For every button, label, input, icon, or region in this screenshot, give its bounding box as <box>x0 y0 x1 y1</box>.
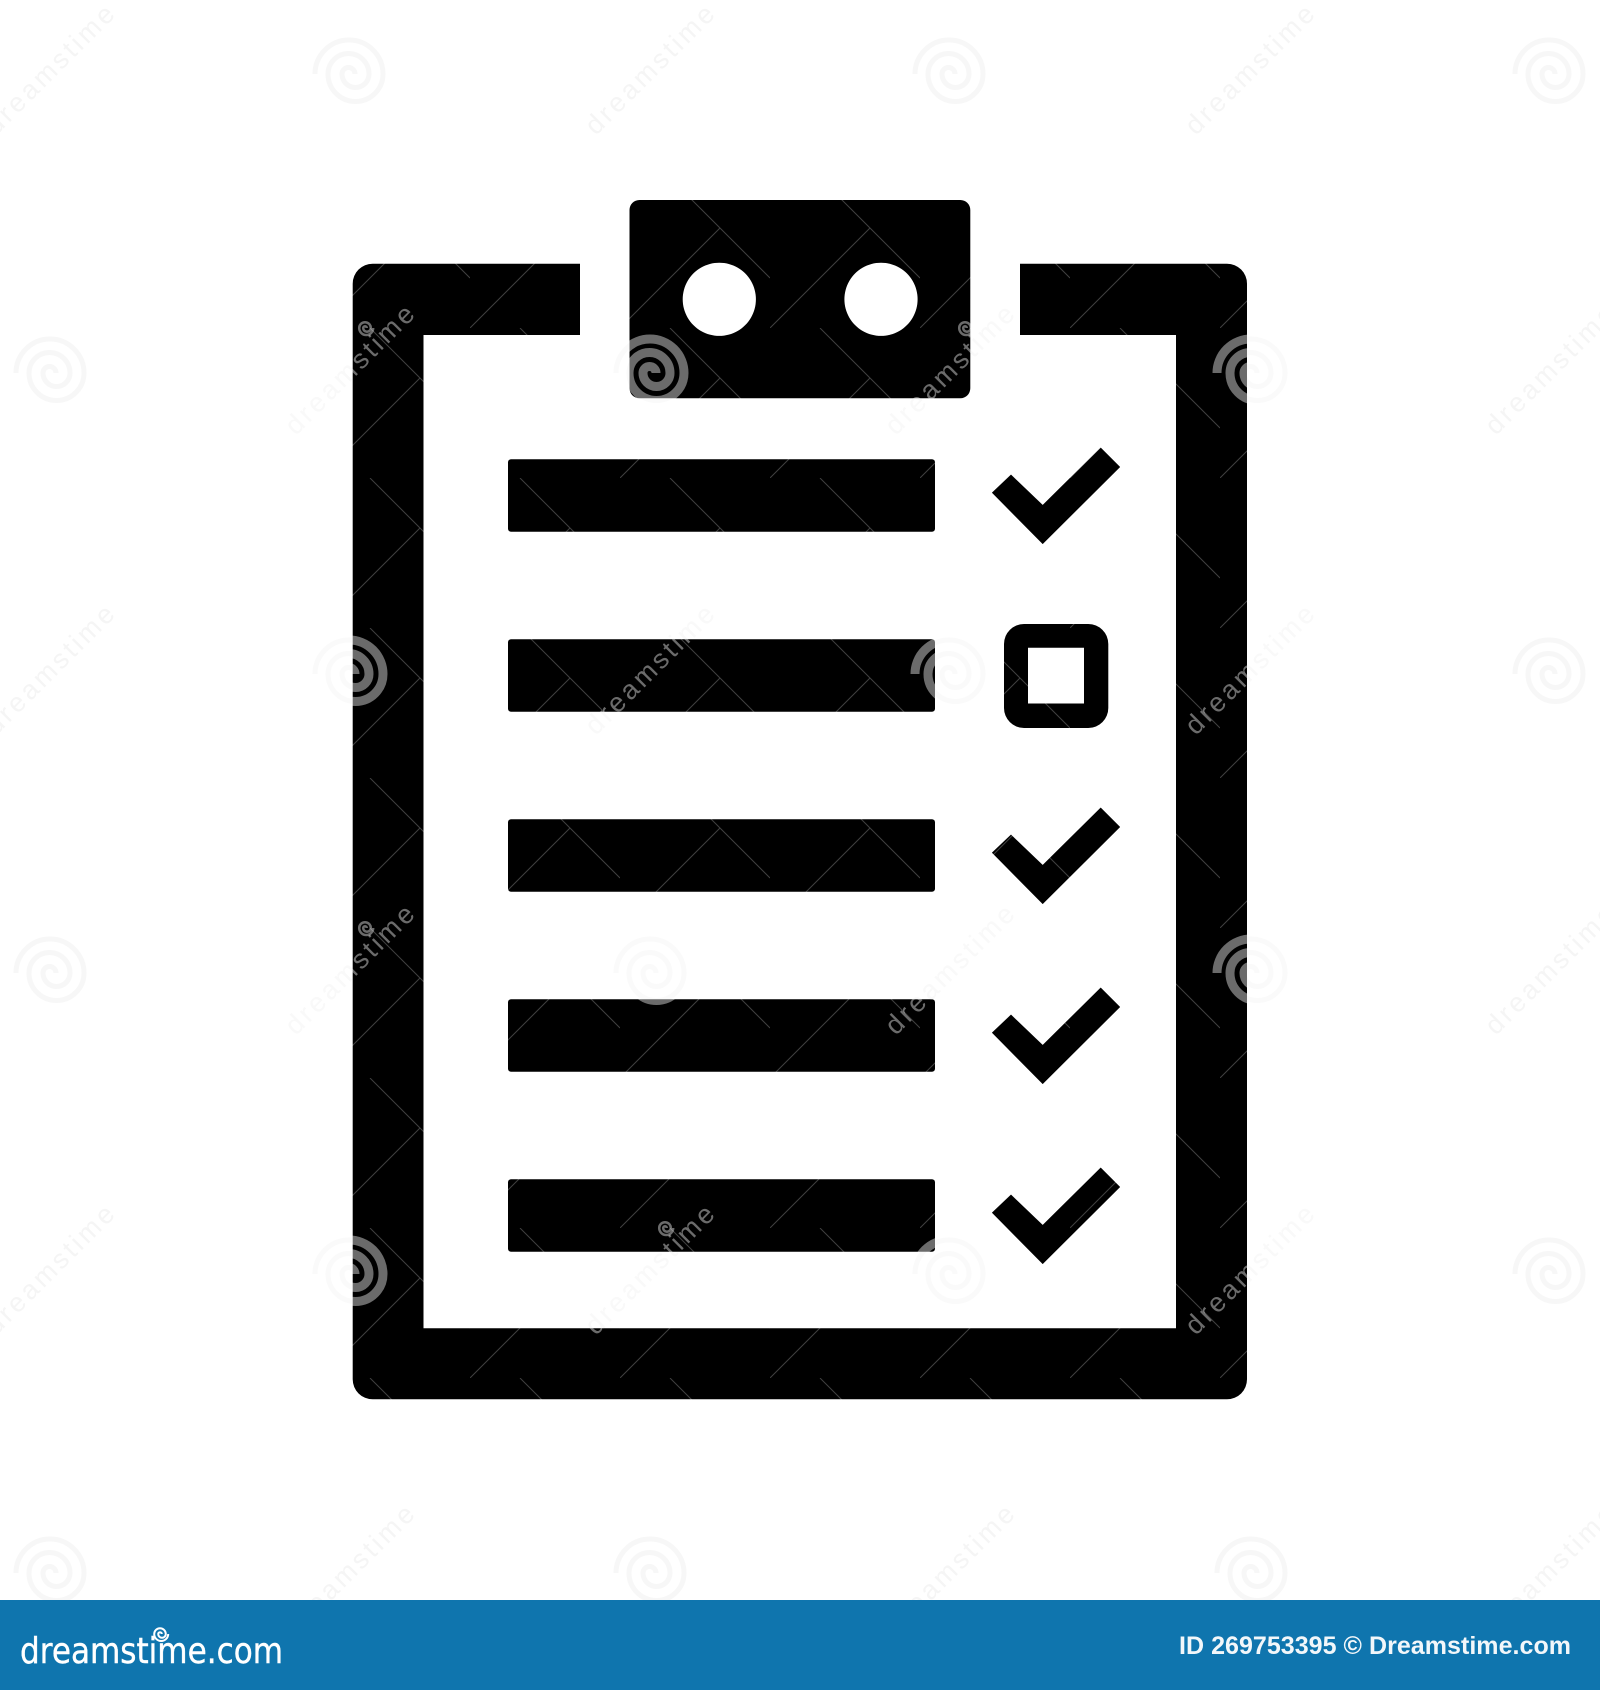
watermark layer on white: dreamstime <box>279 899 420 1040</box>
watermark layer on white: dreamstime <box>279 1499 420 1640</box>
clipboard icon <box>353 200 1247 1399</box>
watermark layer over black: dreamstime <box>1179 599 1320 740</box>
watermark layer on white: dreamstime <box>1179 1199 1320 1340</box>
watermark layer over black <box>279 190 1320 1410</box>
watermark layer over black: dreamstime <box>579 599 720 740</box>
watermark layer on white: dreamstime <box>879 1499 1020 1640</box>
watermark layer over black: dreamstime <box>279 899 420 1040</box>
watermark layer over black: dreamstime <box>879 299 1020 440</box>
watermark layer on white: dreamstime <box>1179 599 1320 740</box>
watermark layer on white: dreamstime <box>579 0 720 140</box>
watermark layer on white: dreamstime <box>279 299 420 440</box>
watermark layer on white: dreamstime <box>579 1199 720 1340</box>
watermark layer on white: dreamstime <box>579 599 720 740</box>
watermark layer on white: dreamstime <box>1179 0 1320 140</box>
footer logo: dreamstime.com <box>20 1631 283 1672</box>
watermark layer over black: dreamstime <box>579 1199 720 1340</box>
checklist row 5: bar and check <box>508 1168 1120 1264</box>
checklist row 2: bar and empty checkbox <box>508 624 1108 728</box>
clip with two holes <box>630 200 970 398</box>
watermark layer over black: dreamstime <box>879 899 1020 1040</box>
watermark layer over black: dreamstime <box>1179 1199 1320 1340</box>
checklist row 3: bar and check <box>508 808 1120 904</box>
checklist row 1: bar and check <box>508 448 1120 544</box>
footer bar <box>0 1600 1600 1690</box>
footer image id: ID 269753395 © Dreamstime.com <box>1179 1632 1571 1660</box>
watermark layer on white: dreamstime <box>879 899 1020 1040</box>
clipboard frame <box>353 264 1247 1399</box>
watermark layer over black: dreamstime <box>279 299 420 440</box>
checklist row 4: bar and check <box>508 988 1120 1084</box>
watermark layer on white: dreamstime <box>879 299 1020 440</box>
